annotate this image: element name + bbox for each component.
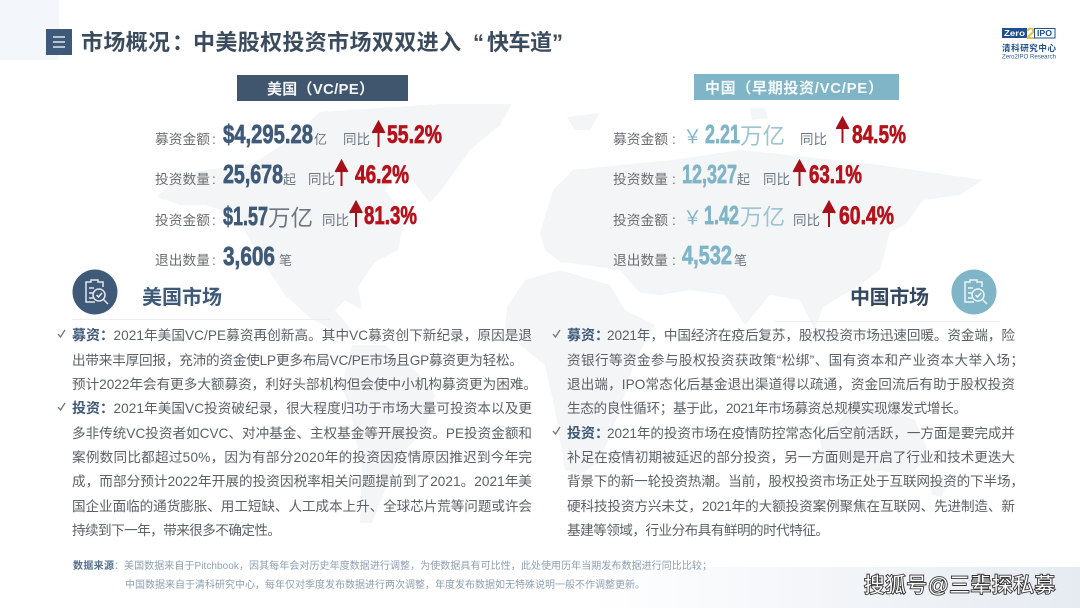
US stat: deal value: 投资金额 [155, 213, 210, 228]
logo: Zero2IPO: 清科研究中心 [1002, 43, 1056, 53]
US investment paragraph: 国企业面临的通货膨胀、用工短缺、人工成本上升、全球芯片荒等问题或许会 [72, 498, 532, 514]
China stat: exits: 退出数量 [613, 253, 668, 268]
China stat: fundraising [613, 118, 906, 149]
US stat: fundraising: 同比 [343, 132, 370, 147]
title: “ [473, 30, 484, 55]
US stat: deal count: 投资数量 [155, 172, 210, 187]
China stat: deal value: : [672, 213, 676, 228]
US stat: deal count: 46.2% [355, 161, 409, 189]
title icon [46, 29, 72, 55]
background: footer gradient band [590, 567, 1080, 608]
China fundraising paragraph: ： [595, 327, 609, 343]
US stat: deal count: : [212, 172, 216, 187]
US stat: exits [155, 241, 292, 271]
China stat: deal count [613, 159, 862, 189]
US fundraising paragraph: 募资 [72, 327, 100, 343]
China stat: fundraising: 募资金额 [613, 132, 668, 147]
China stat: deal value: 60.4% [839, 202, 894, 230]
US stat: exits: 3,606 [223, 241, 275, 271]
logo: Zero2IPO: 2 [1026, 24, 1035, 43]
data source note: 美国数据来自于Pitchbook，因其每年会对历史年度数据进行调整，为使数据具有可比性，此处使用历年当期发布数据进行同比比较； [124, 559, 712, 572]
title: ： [172, 30, 194, 55]
heading: China market: 中国市场 [850, 285, 929, 309]
US stat: deal value: $1.57 [223, 201, 268, 231]
heading: US market: 美国市场 [142, 285, 222, 309]
China stat: deal count: : [672, 172, 676, 187]
China investment paragraph: 基建等领域，行业分布具有鲜明的时代特征。 [567, 522, 829, 538]
US stat: exits: 笔 [279, 253, 292, 268]
US investment paragraph: 2021年美国VC投资破纪录，很大程度归功于市场大量可投资本以及更 [114, 400, 532, 416]
US stat: deal value: : [212, 213, 216, 228]
China investment paragraph: 投资 [567, 425, 595, 441]
data source note: 中国数据来自于清科研究中心，每年仅对季度发布数据进行两次调整，年度发布数据如无特殊说明一般不作调整更新。 [125, 578, 645, 591]
China stat: deal value [613, 200, 894, 230]
world map backdrop [157, 104, 983, 523]
background: pale corner [0, 0, 59, 60]
US fundraising paragraph: 2021年美国VC/PE募资再创新高。其中VC募资创下新纪录，原因是退 [114, 327, 532, 343]
China stat: deal value: 投资金额 [613, 213, 668, 228]
US stat: deal count: 25,678 [223, 159, 283, 189]
US investment paragraph: 多非传统VC投资者如CVC、对冲基金、主权基金等开展投资。PE投资金额和 [72, 425, 532, 441]
header: US [237, 75, 408, 101]
US stat: deal value: 万亿 [268, 206, 313, 231]
US stat: deal count [155, 159, 409, 189]
US fundraising paragraph: 出带来丰厚回报，充沛的资金使LP更多布局VC/PE市场且GP募资更为轻松。 [72, 352, 523, 368]
US investment paragraph: 案例数同比都超过50%，因为有部分2020年的投资因疫情原因推迟到今年完 [72, 449, 532, 465]
title: 中美股权投资市场双双进入 [193, 30, 461, 55]
data source note [73, 559, 712, 591]
China stat: exits: 笔 [734, 253, 747, 268]
US investment paragraph: 成，而部分预计2022年开展的投资因税率相关问题提前到了2021。2021年美 [72, 473, 532, 489]
China stat: exits: : [672, 253, 676, 268]
logo: Zero2IPO: Zero2IPO Research [1002, 54, 1056, 60]
US stat: exits: : [212, 253, 216, 268]
logo: Zero2IPO [1002, 24, 1056, 60]
China fundraising paragraph: 2021年，中国经济在疫后复苏，股权投资市场迅速回暖。资金端，险 [607, 327, 1015, 343]
US stat: fundraising: 募资金额 [155, 132, 210, 147]
China stat: deal value: 万亿 [740, 205, 785, 230]
China investment paragraph: 背景下的新一轮投资热潮。当前，股权投资市场正处于互联网投资的下半场， [567, 473, 1024, 489]
US fundraising paragraph: 预计2022年会有更多大额募资，利好头部机构但会使中小机构募资更为困难。 [72, 376, 537, 392]
US stat: deal value [155, 201, 417, 231]
China stat: fundraising: ￥ [683, 127, 702, 148]
US fundraising paragraph: ： [100, 327, 114, 343]
US stat: exits: 退出数量 [155, 253, 210, 268]
logo: Zero2IPO: IPO [1037, 29, 1052, 38]
header: China [694, 74, 899, 100]
China stat: deal count: 同比 [763, 172, 790, 187]
title: ” [552, 30, 563, 55]
China stat: exits: 4,532 [682, 240, 732, 270]
China stat: deal count: 12,327 [682, 159, 737, 189]
China stat: fundraising: 万亿 [740, 124, 785, 149]
China stat: fundraising: : [672, 132, 676, 147]
China stat: fundraising: 同比 [800, 132, 827, 147]
China investment paragraph: 硬科技投资方兴未艾，2021年的大额投资案例聚焦在互联网、先进制造、新 [567, 498, 1015, 514]
title: 市场概况 [81, 30, 170, 55]
US stat: deal count: 同比 [308, 172, 335, 187]
US stat: fundraising: $4,295.28 [223, 119, 313, 149]
China stat: deal count: 起 [737, 172, 750, 187]
US stat: fundraising: 亿 [314, 132, 327, 147]
China fundraising paragraph: 生态的良性循环；基于此，2021年市场募资总规模实现爆发式增长。 [567, 400, 967, 417]
icon: China market magnifier [952, 270, 996, 314]
title: 快车道 [487, 30, 552, 55]
US stat: deal value: 81.3% [364, 202, 417, 230]
title [81, 30, 563, 55]
China stat: fundraising: 2.21 [705, 119, 740, 149]
US investment paragraph: 投资 [72, 400, 100, 416]
US stat: fundraising: 55.2% [387, 121, 442, 149]
logo: Zero2IPO: Zero [1004, 28, 1025, 38]
China fundraising paragraph: 资银行等资金参与股权投资获政策“松绑”、国有资本和产业资本大举入场； [567, 352, 1024, 369]
China stat: exits [613, 240, 747, 270]
data source note: ： [114, 561, 124, 572]
China investment paragraph: 2021年的投资市场在疫情防控常态化后空前活跃，一方面是要完成并 [607, 425, 1015, 441]
China stat: fundraising: 84.5% [852, 121, 906, 149]
China fundraising paragraph [553, 327, 1024, 417]
China investment paragraph [553, 425, 1024, 538]
China stat: deal count: 63.1% [809, 161, 862, 189]
text block: China market [553, 327, 1024, 538]
watermark: 搜狐号@三辈探私募 [864, 574, 1055, 597]
China stat: deal count: 投资数量 [613, 172, 668, 187]
China stat: deal value: 1.42 [704, 200, 739, 230]
icon: US market magnifier [72, 270, 118, 314]
China stat: deal value: ￥ [683, 208, 702, 229]
US stat: fundraising [155, 119, 442, 149]
data source note: 数据来源 [73, 559, 114, 572]
US fundraising paragraph [58, 327, 537, 392]
header: US: 美国（VC/PE） [267, 80, 374, 98]
US investment paragraph [58, 400, 532, 538]
China investment paragraph: 补足在疫情初期被延迟的部分投资，另一方面则是开启了行业和技术更迭大 [567, 449, 1015, 465]
China fundraising paragraph: 退出端，IPO常态化后基金退出渠道得以疏通，资金回流后有助于股权投资 [567, 376, 1015, 392]
US investment paragraph: 持续到下一年，带来很多不确定性。 [72, 522, 281, 538]
China investment paragraph: ： [595, 425, 609, 441]
China fundraising paragraph: 募资 [567, 327, 595, 343]
text block: US market [58, 327, 537, 538]
header: China: 中国（早期投资/VC/PE） [705, 79, 883, 97]
China stat: deal value: 同比 [793, 213, 820, 228]
US investment paragraph: ： [100, 400, 114, 416]
US stat: fundraising: : [212, 132, 216, 147]
US stat: deal value: 同比 [322, 213, 349, 228]
US stat: deal count: 起 [283, 172, 296, 187]
